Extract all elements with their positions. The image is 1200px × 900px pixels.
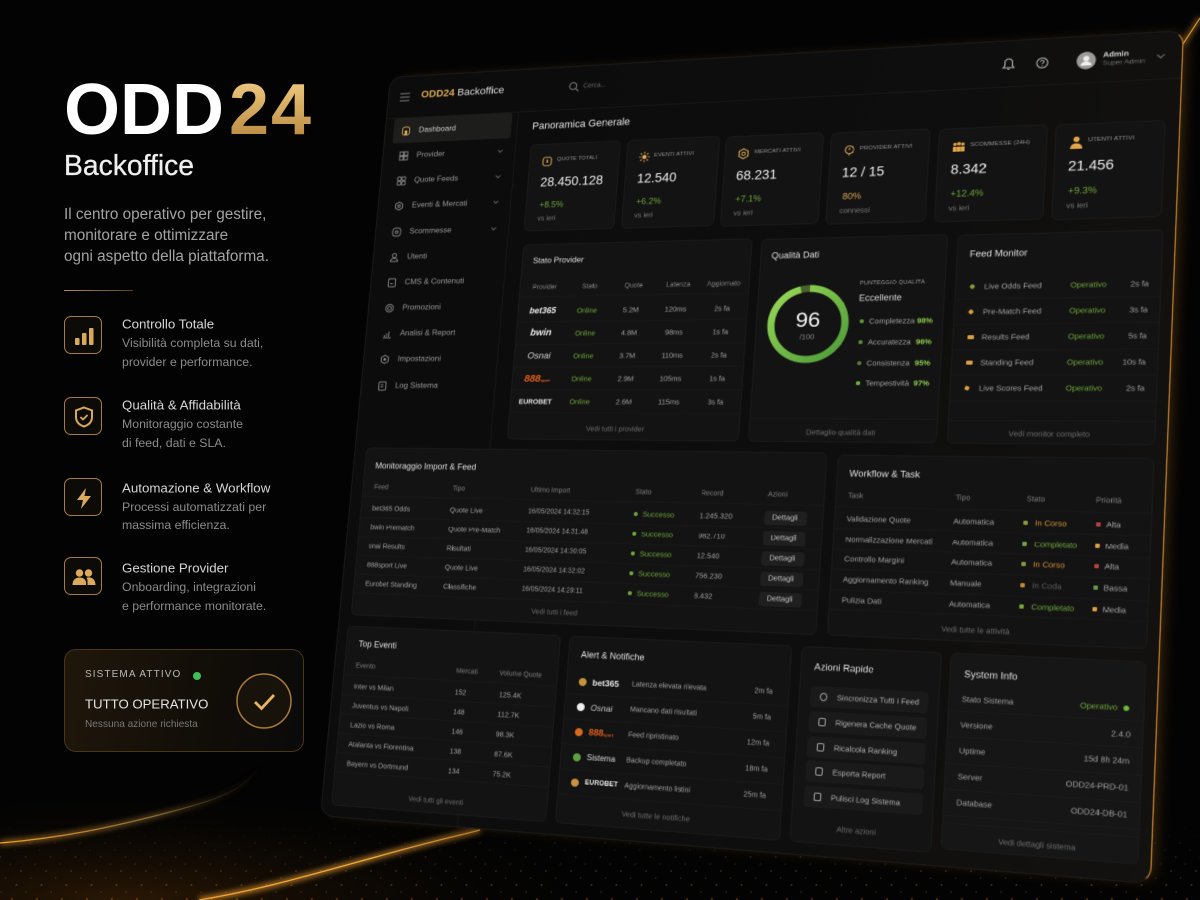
- list: feeds: Operativo: [1068, 331, 1105, 341]
- callout: sistema attivo: Nessuna azione richiesta: [85, 719, 198, 730]
- stat card: Quote Totali: +8.5%: [539, 199, 564, 209]
- nav item: Provider: Provider: [416, 149, 445, 159]
- panel: Qualità Dati: [748, 234, 948, 443]
- list: feeds: Live Odds Feed: [984, 281, 1042, 291]
- table: top events: Lazio vs Roma: [350, 720, 395, 731]
- table: provider status: Quote: [624, 282, 643, 289]
- table: tasks: Validazione Quote: [846, 514, 911, 525]
- table: tasks: In Corso: [1035, 518, 1067, 528]
- nav item: CMS & Contenuti: [388, 276, 465, 288]
- table: provider status: 115ms: [658, 397, 680, 406]
- table: provider status: EUROBET: [518, 397, 552, 405]
- stat card: Mercati Attivi: 68.231: [736, 167, 777, 183]
- table: tasks: Aggiornamento Ranking: [843, 575, 929, 587]
- table: imports: Successo: [639, 549, 672, 559]
- table: provider status: 3s fa: [707, 397, 724, 406]
- chart: quality donut 96/100: 96: [795, 307, 821, 332]
- list: system values: ODD24-PRD-01: [1065, 779, 1129, 793]
- stat card: Provider Attivi: 12 / 15: [841, 164, 885, 180]
- table: top events: 87.6K: [494, 749, 513, 759]
- table: provider status: Online: [573, 351, 594, 360]
- table: imports: snai Results: [368, 541, 405, 551]
- table: imports: Quote Pre-Match: [448, 524, 501, 534]
- nav item: Scommesse: Scommesse: [409, 225, 452, 236]
- table: imports: bet365 Odds: [372, 504, 411, 513]
- link: Dettaglio qualità dati: Dettaglio qualità dati: [806, 427, 875, 437]
- stat card: Scommesse 24H: SCOMMESSE (24H): [970, 140, 1030, 148]
- stat card: Quote Totali: vs ieri: [537, 213, 556, 222]
- list: feeds: Operativo: [1065, 383, 1102, 393]
- table: imports: Dettagli: [766, 593, 793, 604]
- list: feeds: 2s fa: [1130, 279, 1149, 288]
- table: top events: Atalanta vs Fiorentina: [348, 739, 414, 752]
- list: alerts: Backup completato: [626, 757, 687, 768]
- nav item: Eventi & Mercati: [394, 198, 499, 212]
- stat card: Eventi Attivi: +6.2%: [636, 196, 661, 206]
- table: tasks: Stato: [1026, 496, 1045, 504]
- stat card: Provider Attivi: 80%: [842, 191, 861, 201]
- nav item: Log Sistema: [378, 380, 438, 392]
- nav item: Promozioni: [384, 302, 441, 314]
- link: Vedi tutte le attività: Vedi tutte le attività: [941, 624, 1010, 636]
- nav item: Quote Feeds: [396, 173, 501, 186]
- list: alerts: Mancano dati risultati: [630, 706, 697, 717]
- table: imports: Tipo: [452, 485, 465, 492]
- table: tasks: Completato: [1034, 539, 1077, 550]
- table: top events: Volume Quote: [499, 670, 542, 679]
- nav item: Utenti: Utenti: [407, 251, 427, 261]
- table: tasks: [842, 492, 1129, 615]
- feature: Automazione & Workflow: [64, 478, 270, 532]
- table: tasks: Alta: [1104, 562, 1119, 572]
- list: alerts: 888sport: [588, 727, 613, 738]
- heading: Workflow & Task: Workflow & Task: [849, 468, 920, 480]
- stat card: Quote Totali: 28.450.128: [540, 172, 604, 189]
- list: system values: Stato Sistema: [962, 694, 1014, 706]
- table: top events: 75.2K: [492, 769, 511, 779]
- table: tasks: Task: [848, 493, 864, 500]
- stat card: Utenti Attivi: [1051, 120, 1166, 220]
- list: quality metrics: Consistenza: [866, 358, 910, 367]
- table: tasks: Automatica: [952, 537, 993, 547]
- list: quality metrics: Accuratezza: [868, 337, 911, 346]
- intro text: monitorare e ottimizzare: [64, 227, 228, 244]
- feature: Qualità & Affidabilità: Qualità & Affidabilità: [122, 397, 241, 412]
- table: provider status: 2.6M: [616, 397, 632, 405]
- stat card: Utenti Attivi: UTENTI ATTIVI: [1088, 135, 1135, 143]
- heading: Stato Provider: Stato Provider: [533, 255, 584, 265]
- stat card: Utenti Attivi: 21.456: [1068, 157, 1114, 174]
- feature: Controllo Totale: Visibilità completa su dati,: [122, 336, 263, 350]
- buttons: quick actions: Esporta Report: [832, 768, 886, 781]
- table: tasks: Controllo Margini: [844, 554, 904, 565]
- list: quality metrics: 96%: [915, 337, 932, 346]
- stat card: Quote Totali: [523, 140, 621, 231]
- top bar: [387, 31, 1183, 119]
- subtitle: Backoffice: Backoffice: [64, 149, 194, 181]
- table: provider status: [518, 280, 741, 406]
- list: system values: 2.4.0: [1111, 728, 1131, 739]
- title: ODD24: 24: [229, 70, 313, 150]
- nav item: Impostazioni: Impostazioni: [397, 354, 441, 363]
- list: feeds: Pre-Match Feed: [983, 306, 1042, 316]
- title: ODD24: ODD: [64, 70, 224, 150]
- stat card: Utenti Attivi: vs ieri: [1066, 200, 1088, 210]
- nav item: Scommesse: [392, 225, 496, 238]
- list: feeds: Live Scores Feed: [979, 383, 1043, 393]
- intro text: [64, 206, 269, 265]
- table: imports: Successo: [642, 510, 675, 519]
- table: provider status: 4.8M: [621, 328, 637, 336]
- link: Vedi monitor completo: Vedi monitor completo: [1008, 429, 1090, 439]
- panel: Alert & Notifiche: [555, 635, 792, 841]
- stat card: Eventi Attivi: 12.540: [637, 170, 677, 185]
- table: top events: 152: [454, 687, 467, 696]
- feature: Qualità & Affidabilità: Monitoraggio costante: [122, 417, 243, 431]
- stat card: Mercati Attivi: vs ieri: [733, 208, 753, 217]
- table: imports: Ultimo Import: [530, 487, 571, 494]
- heading: Alert & Notifiche: Alert & Notifiche: [581, 649, 645, 663]
- text: punteggio qualità: Eccellente: [859, 292, 902, 303]
- panel: Azioni Rapide: [790, 646, 942, 853]
- table: imports: bwin Prematch: [370, 522, 415, 532]
- list: alerts: 25m fa: [743, 791, 766, 800]
- feature: Gestione Provider: [64, 557, 266, 613]
- table: imports: Classifiche: [443, 582, 477, 592]
- table: imports: 1.245.320: [699, 511, 733, 521]
- stat card: Mercati Attivi: [720, 132, 824, 227]
- heading: Top Eventi: Top Eventi: [358, 639, 397, 650]
- table: provider status: 1s fa: [709, 373, 725, 382]
- icon: bell: [1002, 58, 1016, 70]
- heading: Monitoraggio: Monitoraggio Import & Feed: [375, 461, 477, 472]
- nav item: Analisi & Report: Analisi & Report: [400, 328, 456, 337]
- list: system values: ODD24-DB-01: [1070, 806, 1128, 820]
- table: provider status: bet365: [529, 305, 556, 315]
- table: imports: Dettagli: [769, 553, 796, 563]
- sidebar navigation: [321, 112, 519, 826]
- table: imports: 888sport Live: [367, 560, 407, 570]
- buttons: quick actions: Pulisci Log Sistema: [831, 793, 900, 808]
- table: top events: Bayern vs Dortmund: [346, 758, 409, 771]
- table: provider status: Provider: [532, 284, 557, 291]
- table: imports: 16/05/2024 14:32:02: [523, 566, 585, 575]
- table: provider status: 98ms: [665, 327, 683, 336]
- table: imports: 16/05/2024 14:32:15: [528, 508, 590, 516]
- buttons: quick actions: Ricalcola Ranking: [834, 743, 897, 756]
- list: alerts: 2m fa: [754, 687, 773, 695]
- user name: Admin: [1103, 48, 1129, 59]
- link: Vedi tutti gli eventi: Vedi tutti gli eventi: [408, 793, 464, 806]
- table: imports: 12.540: [696, 551, 720, 560]
- table: tasks: Media: [1102, 604, 1126, 615]
- avatar: [1076, 51, 1096, 70]
- table: provider status: 5.2M: [623, 305, 639, 313]
- table: imports: 16/05/2024 14:29:11: [521, 586, 583, 595]
- table: imports: 982.710: [698, 531, 725, 540]
- link: Vedi tutti i feed: Vedi tutti i feed: [531, 607, 578, 617]
- table: provider status: Latenza: [666, 281, 691, 288]
- list: system values: Versione: [960, 719, 993, 731]
- table: imports: Successo: [641, 529, 673, 539]
- table: imports: Stato: [635, 488, 652, 496]
- icon: help: [1036, 56, 1050, 70]
- list: alerts: 5m fa: [752, 713, 771, 721]
- table: tasks: Normalizzazione Mercati: [845, 534, 933, 546]
- table: tasks: Tipo: [955, 495, 971, 502]
- list: system values: Database: [956, 798, 992, 810]
- stat card: Utenti Attivi: +9.3%: [1068, 185, 1097, 196]
- table: imports: Eurobet Standing: [365, 579, 417, 589]
- heading: Panoramica Generale: Panoramica Generale: [532, 116, 630, 132]
- list: quality metrics: 98%: [917, 316, 933, 325]
- list: feeds: Results Feed: [981, 332, 1030, 341]
- feature: Controllo Totale: Controllo Totale: [122, 316, 214, 331]
- nav item: Quote Feeds: Quote Feeds: [414, 173, 459, 184]
- link: Vedi dettagli sistema: Vedi dettagli sistema: [998, 837, 1076, 852]
- table: top events: Inter vs Milan: [354, 681, 394, 692]
- list: system values: Server: [957, 772, 982, 783]
- table: top events: Juventus vs Napoli: [352, 700, 409, 712]
- table: imports: Dettagli: [770, 533, 797, 542]
- nav item: CMS & Contenuti: CMS & Contenuti: [404, 276, 465, 286]
- list: feeds: Operativo: [1070, 279, 1107, 289]
- table: top events: 134: [448, 765, 460, 775]
- intro text: ogni aspetto della piattaforma.: [64, 248, 269, 265]
- stat card: Provider Attivi: connessi: [839, 205, 870, 215]
- stat card: Mercati Attivi: +7.1%: [735, 193, 761, 204]
- list: feeds: Standing Feed: [980, 358, 1034, 367]
- list: alerts: bet365: [592, 677, 619, 688]
- feature: Gestione Provider: Onboarding, integrazioni: [122, 580, 256, 594]
- feature: Controllo Totale: [64, 316, 263, 369]
- brand: ODD24 Backoffice: ODD24 Backoffice: [421, 85, 505, 100]
- link: Vedi tutti i provider: Vedi tutti i provider: [586, 424, 644, 433]
- callout: sistema attivo: [64, 649, 304, 752]
- table: tasks: Automatica: [953, 516, 994, 526]
- table: provider status: Online: [571, 374, 592, 382]
- feature: Automazione & Workflow: Automazione & Workflow: [122, 480, 270, 495]
- table: tasks: Manuale: [950, 578, 982, 589]
- list: quality metrics: 97%: [913, 379, 930, 388]
- table: provider status: Online: [576, 305, 597, 314]
- user name: Super Admin: [1103, 58, 1145, 67]
- list: system values: [956, 694, 1131, 820]
- list: system values: Operativo: [1080, 700, 1118, 712]
- table: imports: 756.230: [695, 571, 722, 581]
- list: system values: 15d 8h 24m: [1083, 753, 1130, 766]
- nav item: Analisi & Report: [382, 328, 456, 339]
- table: provider status: bwin: [530, 327, 552, 338]
- panel: Workflow & Task: [827, 455, 1155, 649]
- stat card: Eventi Attivi: vs ieri: [634, 210, 653, 219]
- table: imports: [365, 484, 806, 608]
- stat card: Scommesse 24H: vs ieri: [948, 203, 970, 213]
- list: alerts: Sistema: [586, 752, 616, 764]
- table: imports: Record: [701, 490, 724, 497]
- table: imports: Azioni: [768, 491, 788, 498]
- table: imports: 16/05/2024 14:31:48: [526, 528, 588, 536]
- nav item: Utenti: [390, 251, 427, 263]
- list: alerts: 18m fa: [745, 765, 768, 773]
- list: quality metrics: 95%: [914, 358, 931, 367]
- list: feeds: 3s fa: [1129, 305, 1148, 314]
- list: alerts: Osnai: [590, 702, 613, 713]
- icon: check badge: [236, 673, 292, 729]
- heading: System Info: System Info: [964, 669, 1018, 682]
- callout: sistema attivo: SISTEMA ATTIVO: [85, 669, 181, 680]
- stat card: Quote Totali: QUOTE TOTALI: [557, 155, 597, 162]
- nav item: Promozioni: Promozioni: [402, 302, 441, 312]
- table: imports: 8.432: [693, 591, 713, 601]
- table: provider status: 105ms: [659, 373, 682, 382]
- heading: Feed Monitor: Feed Monitor: [969, 247, 1028, 259]
- panel: dashboard mockup: [320, 30, 1184, 884]
- table: provider status: 888sport: [524, 372, 550, 384]
- table: provider status: 2.9M: [617, 374, 634, 382]
- table: provider status: Online: [569, 397, 590, 405]
- chart: quality donut 96/100: /100: [799, 332, 815, 341]
- table: top events: 146: [451, 726, 463, 736]
- buttons: quick actions: Sincronizza Tutti i Feed: [837, 693, 919, 707]
- table: tasks: Media: [1105, 541, 1129, 551]
- table: top events: Mercati: [456, 667, 478, 675]
- search box: [568, 82, 606, 92]
- table: provider status: 110ms: [661, 350, 683, 359]
- text: punteggio qualità: [858, 278, 926, 303]
- buttons: quick actions: Rigenera Cache Quote: [835, 718, 917, 732]
- table: top events: 148: [453, 706, 465, 716]
- table: imports: Successo: [636, 589, 669, 599]
- table: top events: Evento: [355, 662, 376, 670]
- nav item: Eventi & Mercati: Eventi & Mercati: [411, 198, 468, 209]
- table: provider status: Stato: [582, 283, 598, 290]
- feature: Automazione & Workflow: Processi automatizzati per: [122, 500, 266, 514]
- table: tasks: Completato: [1031, 602, 1075, 613]
- nav item: Dashboard: Dashboard: [418, 123, 456, 134]
- table: provider status: 2s fa: [710, 350, 727, 359]
- table: imports: Quote Live: [445, 563, 478, 572]
- table: top events: 138: [449, 746, 462, 755]
- search box: Cerca...: [583, 82, 606, 90]
- stat card: Provider Attivi: [825, 128, 931, 225]
- list: alerts: EUROBET: [585, 778, 618, 788]
- text: punteggio qualità: PUNTEGGIO QUALITÀ: [860, 280, 925, 287]
- table: imports: 16/05/2024 14:30:05: [525, 547, 587, 556]
- table: provider status: Aggiornato: [707, 280, 741, 287]
- panel: Top Eventi: [331, 625, 561, 822]
- list: feeds: 5s fa: [1128, 331, 1147, 340]
- table: top events: [346, 662, 542, 779]
- table: tasks: Bassa: [1103, 583, 1128, 594]
- list: feeds: [964, 279, 1149, 393]
- table: tasks: Priorità: [1096, 497, 1122, 505]
- list: feeds: 2s fa: [1126, 383, 1145, 393]
- table: tasks: Automatica: [951, 557, 992, 568]
- list: alerts: Feed ripristinato: [628, 731, 679, 741]
- buttons: quick actions: [813, 692, 920, 808]
- list: quality metrics: Completezza: [869, 316, 915, 326]
- nav item: Impostazioni: [380, 354, 441, 364]
- panel: Stato Provider: [507, 238, 753, 442]
- callout: sistema attivo: TUTTO OPERATIVO: [85, 696, 208, 711]
- user name: [1102, 48, 1146, 67]
- list: feeds: 10s fa: [1122, 357, 1146, 366]
- nav item: Log Sistema: Log Sistema: [395, 381, 438, 390]
- list: quality metrics: Tempestività: [865, 379, 909, 388]
- nav item: Provider: [398, 149, 504, 162]
- table: provider status: 3.7M: [619, 351, 636, 359]
- list: alerts: [570, 677, 773, 800]
- nav item: Dashboard: [402, 123, 456, 136]
- panel: System Info: [940, 653, 1147, 865]
- feature: Qualità & Affidabilità: di feed, dati e SLA.: [122, 436, 226, 450]
- table: imports: Quote Live: [450, 505, 483, 515]
- chart: quality donut 96/100: [766, 284, 850, 364]
- stat card: Provider Attivi: PROVIDER ATTIVI: [860, 144, 913, 152]
- stat card: Mercati Attivi: MERCATI ATTIVI: [754, 148, 801, 155]
- list: quality metrics: [856, 316, 933, 388]
- link: Vedi tutte le notifiche: Vedi tutte le notifiche: [621, 809, 690, 824]
- table: tasks: In Corso: [1033, 560, 1065, 570]
- table: provider status: Online: [575, 328, 596, 337]
- table: tasks: In Coda: [1032, 581, 1062, 591]
- list: alerts: 12m fa: [747, 739, 769, 747]
- link: Altre azioni: Altre azioni: [836, 824, 876, 837]
- table: tasks: Alta: [1106, 519, 1121, 529]
- heading: Qualità Dati: Qualità Dati: [771, 250, 820, 261]
- feature: Gestione Provider: Gestione Provider: [122, 560, 228, 575]
- table: top events: 98.3K: [496, 729, 515, 739]
- table: imports: Feed: [374, 484, 389, 491]
- list: feeds: Operativo: [1069, 305, 1106, 315]
- table: tasks: Pulizia Dati: [842, 595, 882, 606]
- list: system values: Uptime: [959, 745, 986, 757]
- stat card: Scommesse 24H: 8.342: [950, 161, 987, 177]
- feature: Controllo Totale: provider e performance.: [122, 355, 253, 369]
- table: provider status: 2s fa: [714, 303, 730, 312]
- list: feeds: Operativo: [1067, 357, 1103, 367]
- heading: Azioni Rapide: Azioni Rapide: [814, 662, 874, 675]
- panel: Feed Monitor: [947, 229, 1164, 445]
- table: provider status: 120ms: [664, 304, 687, 313]
- table: provider status: Osnai: [527, 350, 551, 361]
- table: tasks: Automatica: [949, 599, 990, 610]
- table: imports: Successo: [638, 569, 670, 579]
- stat card: Eventi Attivi: [621, 136, 720, 229]
- intro text: Il centro operativo per gestire,: [64, 206, 266, 223]
- list: alerts: Latenza elevata rilevata: [632, 681, 707, 692]
- stat card: Eventi Attivi: EVENTI ATTIVI: [654, 151, 694, 159]
- feature: Automazione & Workflow: massima efficienza.: [122, 518, 230, 532]
- table: top events: 125.4K: [499, 689, 522, 699]
- stat card: Scommesse 24H: +12.4%: [950, 188, 984, 199]
- list: alerts: Aggiornamento listini: [624, 782, 690, 794]
- feature: Qualità & Affidabilità: [64, 397, 243, 450]
- table: imports: Dettagli: [768, 573, 794, 583]
- feature: Gestione Provider: e performance monitorate.: [122, 599, 266, 613]
- title: ODD24: [64, 70, 313, 150]
- table: imports: Dettagli: [772, 512, 798, 522]
- stat card: Scommesse 24H: [934, 124, 1048, 223]
- table: imports: Risultati: [446, 543, 471, 553]
- table: top events: 112.7K: [497, 709, 520, 719]
- panel: Monitoraggio Import & Feed: [351, 447, 828, 635]
- table: provider status: 1s fa: [712, 327, 729, 335]
